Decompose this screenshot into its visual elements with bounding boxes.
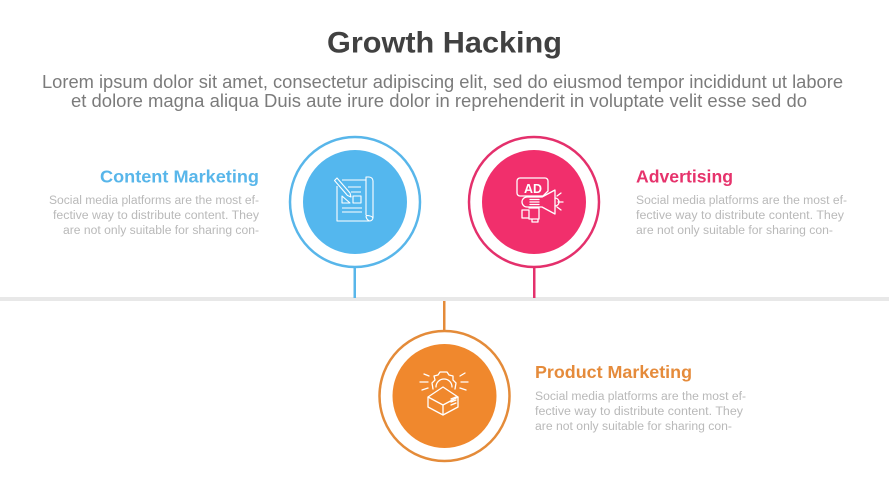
subtitle <box>42 72 843 111</box>
ring: content marketing <box>290 137 420 267</box>
text: content marketing: fective way to distribute content. They <box>53 210 259 222</box>
panel: content marketing <box>49 137 420 298</box>
text: product marketing: are not only suitable for sharing con- <box>535 421 732 433</box>
text: advertising: Social media platforms are the most ef- <box>636 195 847 207</box>
text: product marketing: Social media platforms are the most ef- <box>535 391 746 403</box>
subtitle: Lorem ipsum dolor sit amet, consectetur adipiscing elit, sed do eiusmod tempor incididunt ut labore <box>42 72 843 92</box>
timeline axis <box>0 297 889 301</box>
text: advertising <box>636 195 847 237</box>
connector: content marketing <box>354 267 356 298</box>
text: advertising: fective way to distribute content. They <box>636 210 844 222</box>
ring: advertising <box>469 137 599 267</box>
text: content marketing <box>49 195 259 237</box>
connector: advertising <box>533 267 536 298</box>
icon: box with gear <box>420 372 468 415</box>
text: product marketing: fective way to distribute content. They <box>535 406 743 418</box>
text: content marketing: Social media platforms are the most ef- <box>49 195 259 207</box>
panel: advertising <box>469 137 847 298</box>
disc: product marketing <box>392 344 496 448</box>
icon: megaphone with AD bubble <box>517 178 563 222</box>
disc: advertising <box>482 150 586 254</box>
icon: document with pencil <box>334 177 373 221</box>
text: product marketing <box>535 391 746 433</box>
ring: product marketing <box>380 331 510 461</box>
disc: content marketing <box>303 150 407 254</box>
panel: product marketing <box>380 301 746 461</box>
connector: product marketing <box>443 301 446 331</box>
title: Growth Hacking <box>327 26 562 60</box>
text: advertising: are not only suitable for sharing con- <box>636 225 833 237</box>
heading: content marketing: Content Marketing <box>100 166 259 186</box>
text: content marketing: are not only suitable for sharing con- <box>63 225 259 237</box>
heading: advertising: Advertising <box>636 166 733 186</box>
heading: product marketing: Product Marketing <box>535 362 692 382</box>
icon: megaphone with AD bubble: AD <box>524 181 542 196</box>
subtitle: et dolore magna aliqua Duis aute irure dolor in reprehenderit in voluptate velit esse sed do <box>71 91 807 111</box>
